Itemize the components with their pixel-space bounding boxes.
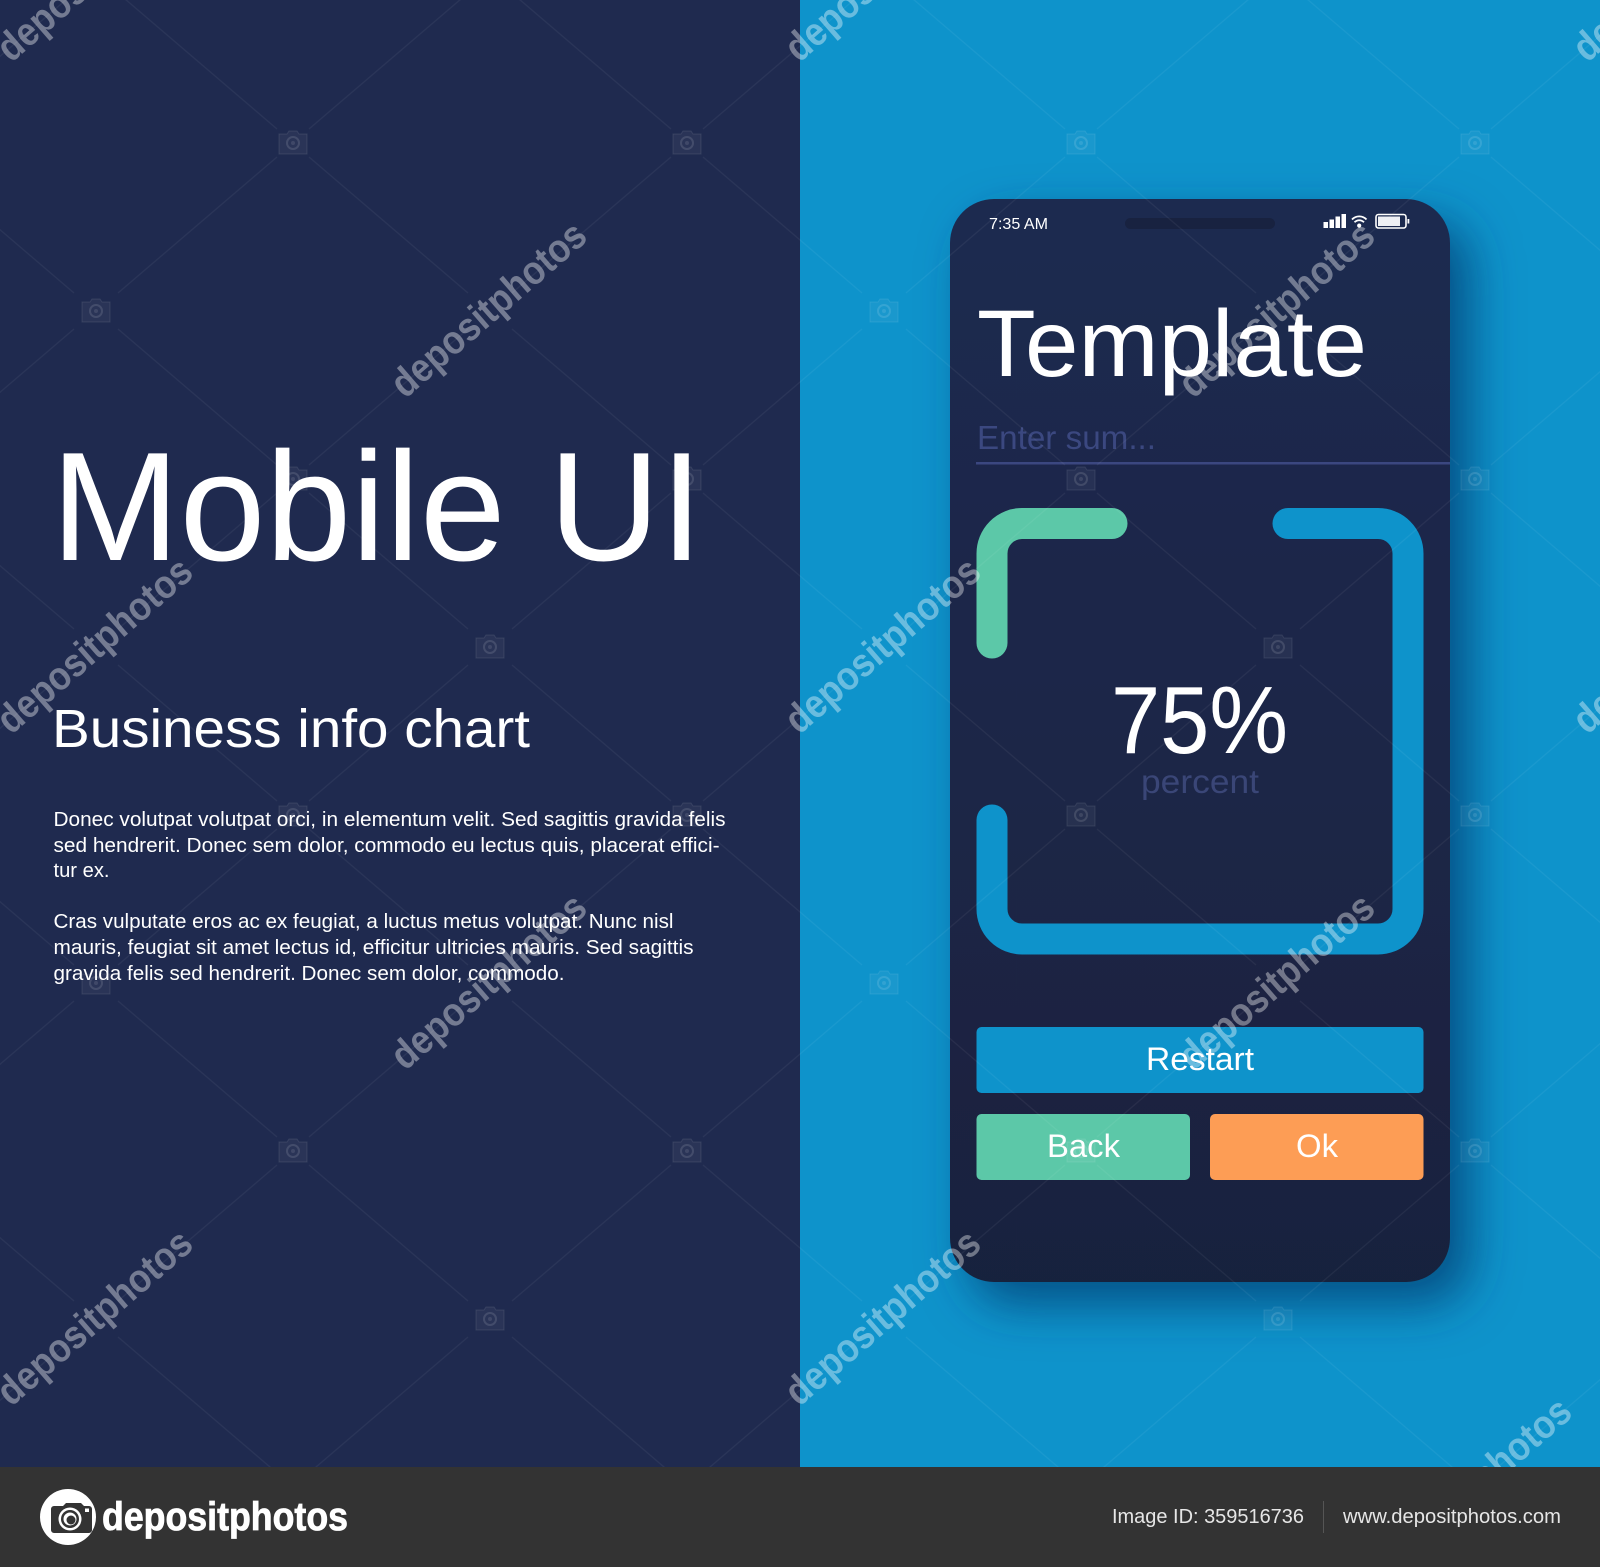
footer url: www.depositphotos.com (1342, 1506, 1561, 1528)
button: Back: Back (1047, 1128, 1121, 1164)
progress segment: blue (992, 524, 1408, 939)
button: Restart (976, 1027, 1424, 1093)
icon: battery (1376, 214, 1409, 228)
panel: left navy background (0, 0, 800, 1467)
progress value: 75%: 75% (1111, 667, 1288, 774)
watermark overlay: depositphotos (1170, 213, 1383, 406)
watermark overlay: depositphotos (776, 1221, 989, 1414)
footer bar (0, 1467, 1600, 1567)
phone notch (1125, 218, 1275, 229)
button: Restart: Restart (1146, 1041, 1254, 1077)
icon: signal bars (1324, 214, 1346, 228)
text block: first paragraph: tur ex. (54, 860, 110, 882)
watermark overlay: depositphotos (382, 885, 595, 1078)
text block: second paragraph: gravida felis sed hendrerit. Donec sem dolor, commodo. (54, 963, 564, 985)
input underline (976, 462, 1450, 464)
subtitle: Business info chart: Business info chart (52, 699, 530, 759)
text block: first paragraph: Donec volutpat volutpat orci, in elementum velit. Sed sagittis gravida felis (54, 809, 726, 831)
watermark overlay: depositphotos (1170, 885, 1383, 1078)
phone body (950, 199, 1450, 1282)
icon: footer camera logo (40, 1489, 96, 1545)
footer logo wordmark: depositphotos (102, 1495, 348, 1539)
text block: second paragraph: mauris, feugiat sit amet lectus id, efficitur ultricies mauris. Sed sagittis (54, 937, 694, 959)
watermark overlay: depositphotos (382, 213, 595, 406)
text block: first paragraph (54, 809, 726, 882)
footer image id: Image ID: 359516736 (1112, 1506, 1304, 1528)
text block: first paragraph: sed hendrerit. Donec sem dolor, commodo eu lectus quis, placerat effici- (54, 835, 720, 857)
panel: right blue background (800, 0, 1600, 1467)
progress segment: green (992, 524, 1112, 643)
button: Ok (1210, 1114, 1424, 1180)
input placeholder: Enter sum: Enter sum... (977, 419, 1156, 456)
watermark overlay: depositphotos (776, 549, 989, 742)
text block: second paragraph: Cras vulputate eros ac ex feugiat, a luctus metus volutpat. Nunc nisl (54, 911, 674, 933)
screen heading: Template: Template (977, 291, 1367, 397)
phone mockup (950, 199, 1450, 1282)
button: Back (976, 1114, 1190, 1180)
title: Mobile UI: Mobile UI (51, 420, 703, 593)
icon: wifi (1352, 216, 1366, 227)
status bar time: 7:35 AM (989, 216, 1048, 233)
text block: second paragraph (54, 911, 694, 985)
button: Ok: Ok (1296, 1128, 1339, 1164)
footer divider (1323, 1501, 1324, 1533)
progress label: percent: percent (1141, 763, 1259, 800)
progress frame (992, 524, 1408, 939)
